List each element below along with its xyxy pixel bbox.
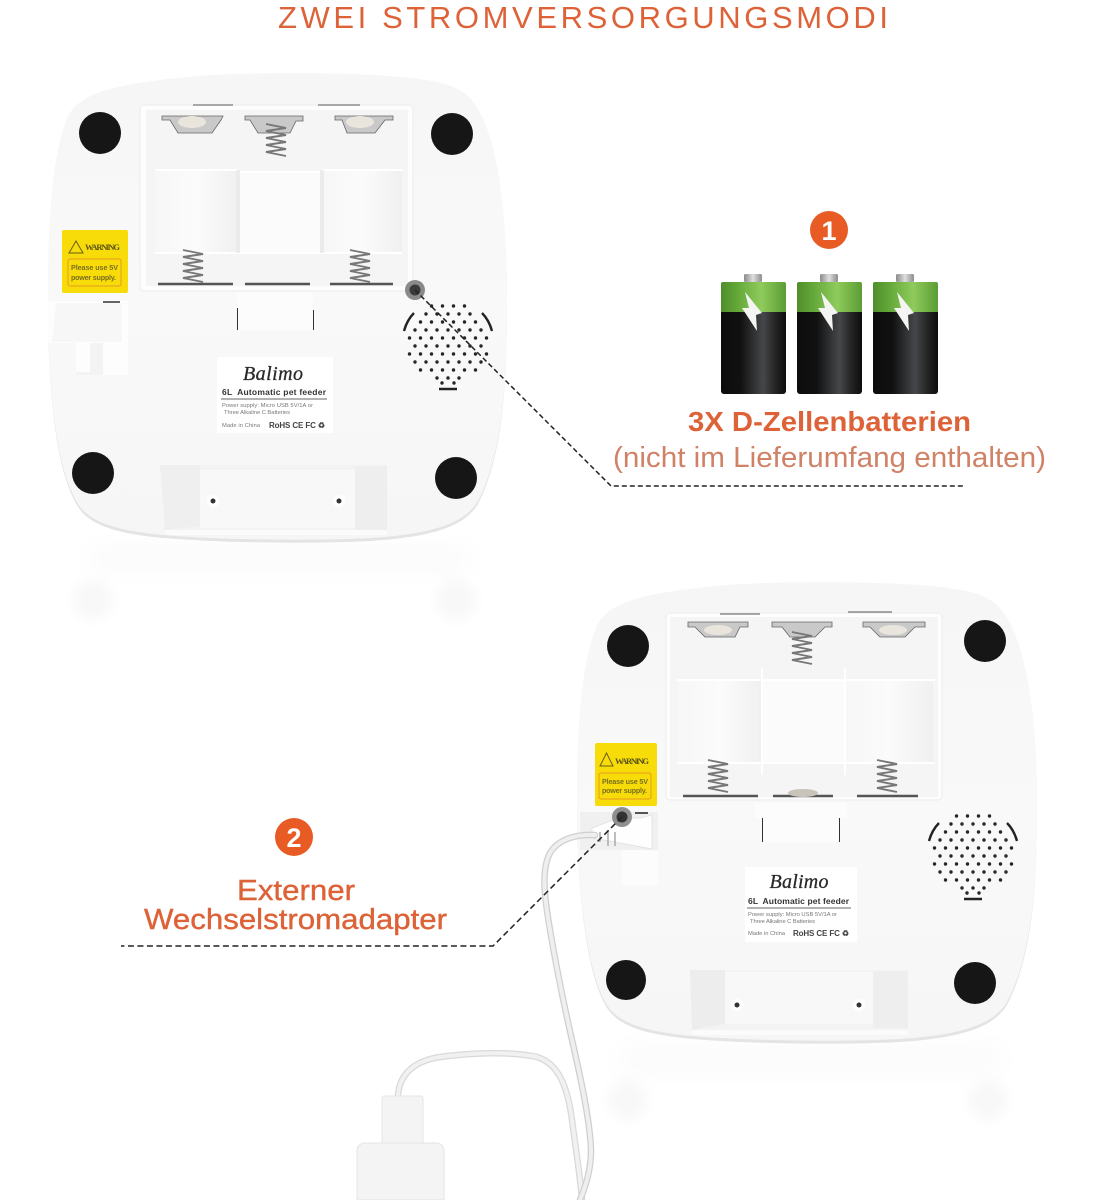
device 2 warning label: Please use 5V: [602, 777, 648, 786]
adapter mode caption: [144, 875, 447, 936]
device 2 tab below compartment: [755, 803, 847, 842]
device 2 product label: Balimo: [770, 871, 828, 893]
device 1 speaker grille: [404, 306, 492, 389]
USB connector strip: [385, 1146, 420, 1151]
USB plug and power adapter: [357, 1096, 444, 1200]
device 1 product label: Three Alkaline C Batteries: [224, 410, 290, 416]
adapter mode caption: Wechselstromadapter: [144, 904, 447, 936]
badge 1: 1: [821, 216, 837, 246]
braided charging cable: [398, 835, 595, 1200]
device 2 warning label: power supply.: [602, 786, 647, 795]
device 2 charging port with plugged connector: [580, 812, 658, 885]
reflections under the devices: [73, 548, 1008, 1120]
device 1 charging port recess: [48, 301, 128, 375]
device 1 body: [48, 73, 507, 540]
badge 1: [810, 211, 848, 249]
device 2 product label: Three Alkaline C Batteries: [750, 919, 815, 925]
device 2 warning label: WARNING: [615, 756, 649, 766]
batteries icon: [721, 274, 938, 394]
device 2 warning label: [595, 743, 657, 806]
device 1: feeder underside on batteries: [48, 73, 507, 543]
device 1 warning label: power supply.: [71, 273, 116, 282]
device 2 rubber feet: [606, 620, 1006, 1004]
device 1 warning label: WARNING: [85, 242, 120, 252]
device 2 product label: Power supply: Micro USB 5V/1A or: [748, 912, 837, 918]
device 1 warning label: [62, 230, 128, 293]
device 1 product label: Made in China: [222, 423, 261, 429]
battery mode caption: 3X D-Zellenbatterien: [688, 406, 971, 437]
battery mode caption: (nicht im Lieferumfang enthalten): [613, 442, 1046, 474]
device 1 tab below compartment: [237, 292, 313, 330]
badge 2: 2: [286, 823, 302, 853]
title: ZWEI STROMVERSORGUNGSMODI: [278, 0, 888, 35]
device 1 bottom edge: [48, 76, 507, 543]
device 1 product label: 6L Automatic pet feeder: [222, 387, 327, 397]
device 2 product label: Made in China: [748, 931, 786, 937]
device 2 product label: RoHS CE FC ♻: [793, 929, 849, 938]
device 2: feeder underside on external adapter: [577, 582, 1037, 1044]
device 1 product label: Balimo: [243, 363, 303, 385]
connector dot and dashed leader 1: [405, 280, 965, 486]
device 2 rear recess: [690, 970, 908, 1035]
device 2 bottom edge: [577, 585, 1037, 1044]
USB plug: [382, 1096, 423, 1146]
connector dot and dashed leader 2: [121, 807, 632, 946]
badge 2: [275, 818, 313, 856]
device 1 warning label: Please use 5V: [71, 263, 118, 272]
device 1 product label: [217, 357, 333, 433]
device 2 product label: 6L Automatic pet feeder: [748, 896, 850, 906]
adapter mode caption: Externer: [237, 875, 355, 907]
device 2 battery compartment: [666, 612, 942, 800]
adapter body: [357, 1143, 444, 1200]
device 1 battery compartment: [140, 105, 413, 291]
device 2 body: [577, 582, 1037, 1041]
device 2 speaker grille: [929, 816, 1017, 899]
device 2 product label: [745, 867, 857, 942]
battery mode caption: [613, 406, 1046, 474]
device 1 product label: Power supply: Micro USB 5V/1A or: [222, 403, 313, 409]
device 1 product label: RoHS CE FC ♻: [269, 421, 325, 430]
device 1 rear recess: [160, 465, 387, 535]
device 1 rubber feet: [72, 112, 477, 499]
